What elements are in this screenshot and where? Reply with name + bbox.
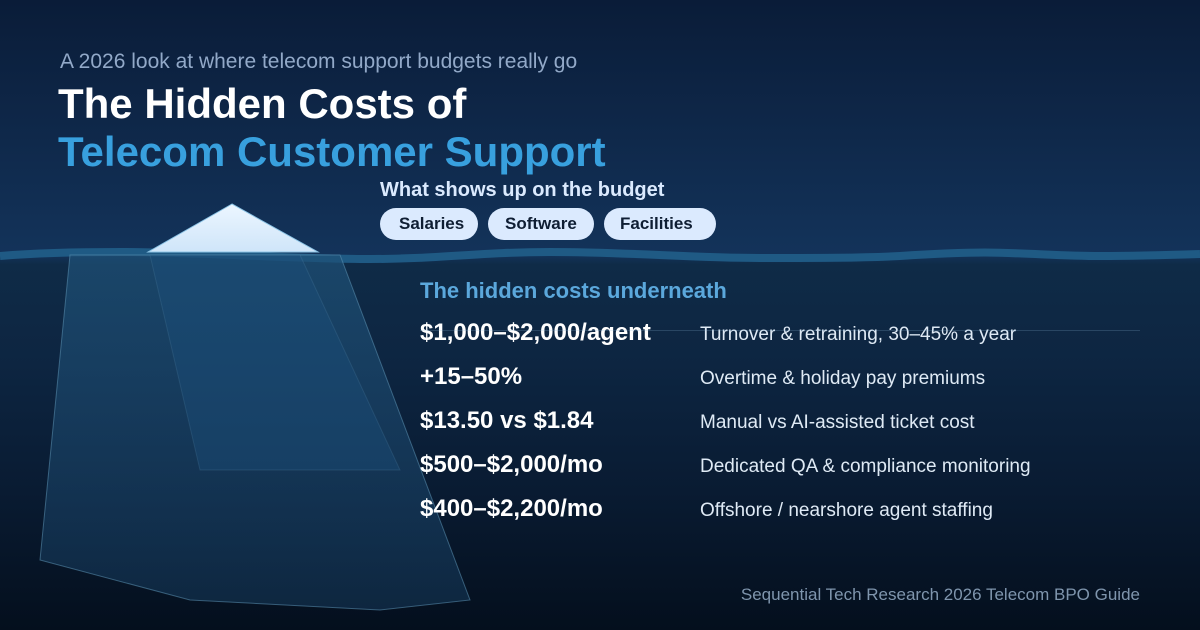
pill: facilities: Facilities xyxy=(620,214,693,233)
pill: software: Software xyxy=(505,214,577,233)
heading: visible budget: What shows up on the budget xyxy=(380,179,664,201)
cost row 5: $400–$2,200/mo xyxy=(420,495,603,522)
pill: salaries: Salaries xyxy=(399,214,464,233)
waterline wave xyxy=(0,252,1200,259)
pill: salaries xyxy=(380,208,478,240)
divider line over first row xyxy=(420,330,1140,331)
iceberg underwater body xyxy=(40,255,470,610)
subtitle: A 2026 look at where telecom support budgets really go xyxy=(60,50,577,73)
cost row 3: $13.50 vs $1.84 xyxy=(420,407,594,434)
iceberg tip xyxy=(148,204,318,252)
cost row 1 description: Turnover & retraining, 30–45% a year xyxy=(700,324,1016,345)
cost row 3 description: Manual vs AI-assisted ticket cost xyxy=(700,412,975,433)
cost row 4 description: Dedicated QA & compliance monitoring xyxy=(700,456,1031,477)
cost row 2 description: Overtime & holiday pay premiums xyxy=(700,368,985,389)
title xyxy=(58,80,606,175)
cost row 4: $500–$2,000/mo xyxy=(420,451,603,478)
heading: hidden costs: The hidden costs underneath xyxy=(420,278,727,303)
pill: facilities xyxy=(604,208,716,240)
source note: Sequential Tech Research 2026 Telecom BPO Guide xyxy=(741,585,1140,604)
iceberg inner facet xyxy=(150,255,400,470)
cost row 5 description: Offshore / nearshore agent staffing xyxy=(700,500,993,521)
cost row 2: +15–50% xyxy=(420,363,522,390)
pill: software xyxy=(488,208,594,240)
cost row 1: $1,000–$2,000/agent xyxy=(420,319,651,346)
title: The Hidden Costs of xyxy=(58,80,466,127)
title: Telecom Customer Support xyxy=(58,128,606,175)
